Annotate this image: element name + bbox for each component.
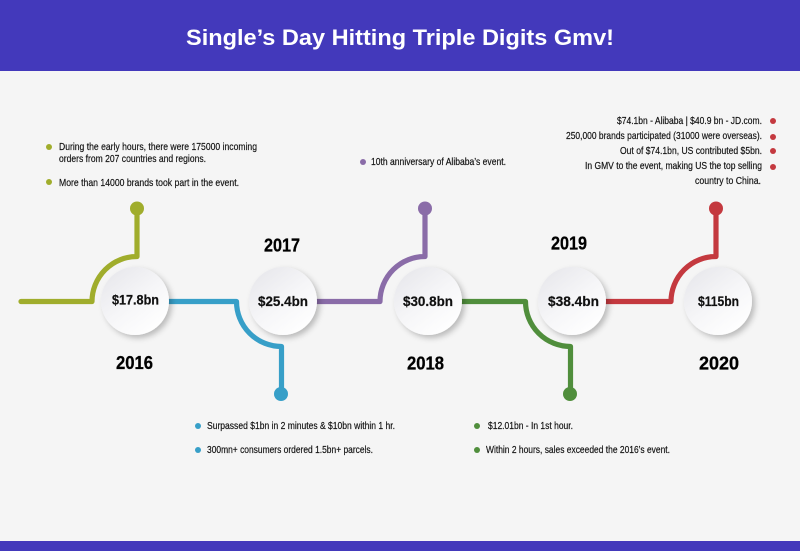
connector: 2019 green: [455, 302, 577, 401]
notes 2019: [474, 420, 670, 456]
connector: 2016 lime: [21, 202, 144, 302]
year 2020: 2020: [699, 354, 739, 374]
connector: 2020 red: [600, 202, 723, 302]
notes 2020: country to China.: [695, 175, 761, 187]
node: 2017 value: [249, 267, 317, 335]
notes 2017: Surpassed $1bn in 2 minutes & $10bn within 1 hr.: [207, 420, 395, 432]
connector: 2018 purple: [310, 202, 432, 302]
title: Single’s Day Hitting Triple Digits Gmv!: [186, 25, 614, 50]
node: 2020 value: [684, 267, 752, 335]
node: 2016 value: $17.8bn: [112, 292, 159, 308]
notes 2019: Within 2 hours, sales exceeded the 2016’s event.: [486, 444, 670, 456]
connector: 2017 blue: [165, 302, 288, 401]
notes 2020: $74.1bn - Alibaba | $40.9 bn - JD.com.: [617, 115, 762, 127]
notes 2020: [566, 115, 776, 187]
notes 2018: 10th anniversary of Alibaba’s event.: [371, 156, 506, 168]
year 2019: 2019: [551, 234, 587, 254]
node: 2018 value: $30.8bn: [403, 294, 453, 309]
notes 2016: More than 14000 brands took part in the event.: [59, 177, 239, 189]
node: 2019 value: [538, 267, 606, 335]
notes 2017: 300mn+ consumers ordered 1.5bn+ parcels.: [207, 444, 373, 456]
notes 2017: [195, 420, 395, 456]
year 2017: 2017: [264, 236, 300, 256]
node: 2017 value: $25.4bn: [258, 294, 308, 309]
notes 2020: In GMV to the event, making US the top selling: [585, 160, 762, 172]
node: 2020 value: $115bn: [698, 294, 739, 309]
node: 2019 value: $38.4bn: [548, 294, 599, 309]
notes 2016: orders from 207 countries and regions.: [59, 153, 206, 165]
notes 2020: Out of $74.1bn, US contributed $5bn.: [620, 145, 762, 157]
notes 2016: [46, 141, 257, 189]
notes 2016: During the early hours, there were 175000 incoming: [59, 141, 257, 153]
footer band: [0, 541, 800, 551]
header band: [0, 0, 800, 71]
year 2016: 2016: [116, 353, 153, 373]
node: 2018 value: [394, 267, 462, 335]
notes 2019: $12.01bn - In 1st hour.: [488, 420, 573, 432]
node: 2016 value: [101, 267, 169, 335]
year 2018: 2018: [407, 354, 444, 374]
